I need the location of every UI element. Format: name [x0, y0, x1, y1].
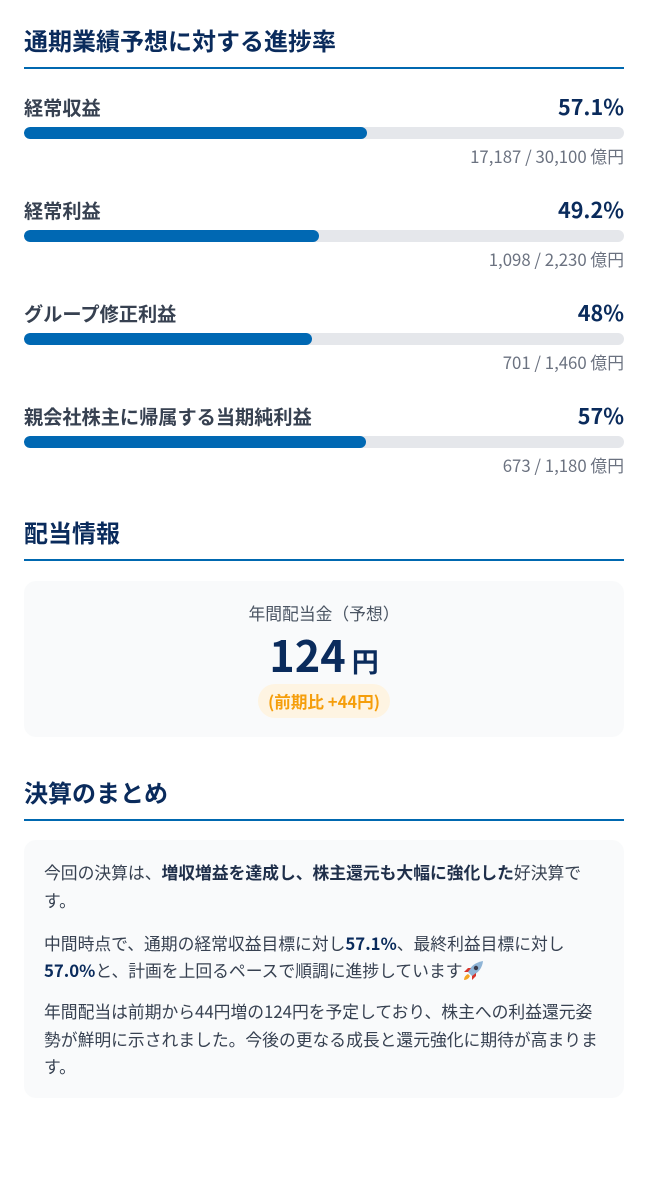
summary paragraph 2: 中間時点で、通期の経常収益目標に対し57.1%、最終利益目標に対し — [44, 931, 565, 955]
summary paragraph 2 — [44, 931, 565, 982]
heading: dividend — [24, 515, 624, 561]
heading: summary — [24, 775, 624, 821]
heading: summary: 決算のまとめ — [24, 774, 168, 809]
summary paragraph 3 — [44, 999, 598, 1078]
summary paragraph 1 — [44, 860, 581, 912]
icon: rocket — [464, 961, 483, 980]
dividend label: 年間配当金（予想） — [248, 601, 400, 625]
progress item: グループ修正利益 — [24, 297, 624, 374]
progress item: 親会社株主に帰属する当期純利益: 673 / 1,180 億円 — [503, 453, 624, 477]
heading: dividend: 配当情報 — [24, 514, 120, 549]
progress item: グループ修正利益: 48% — [578, 297, 624, 328]
summary paragraph 3: 年間配当は前期から44円増の124円を予定しており、株主への利益還元姿 — [44, 999, 592, 1023]
progress item: 経常収益: 17,187 / 30,100 億円 — [470, 144, 624, 168]
badge: year-on-year change: (前期比 +44円) — [268, 689, 380, 713]
summary paragraph 3: す。 — [44, 1054, 76, 1078]
dividend value: 124円 — [269, 623, 379, 685]
heading: progress: 通期業績予想に対する進捗率 — [24, 22, 336, 57]
progress item: グループ修正利益: グループ修正利益 — [24, 299, 176, 327]
progress item: 経常利益: 1,098 / 2,230 億円 — [489, 247, 624, 271]
summary paragraph 2: 57.0%と、計画を上回るペースで順調に進捗しています — [44, 958, 463, 982]
progress item: 経常利益: 49.2% — [558, 194, 624, 225]
progress item: 親会社株主に帰属する当期純利益: 親会社株主に帰属する当期純利益 — [24, 402, 312, 430]
summary paragraph 1: す。 — [44, 888, 76, 912]
heading: progress — [24, 22, 624, 69]
badge: year-on-year change — [258, 684, 390, 718]
panel: summary — [24, 840, 624, 1098]
progress item: 親会社株主に帰属する当期純利益: 57% — [578, 400, 624, 431]
progress item: 経常収益 — [24, 91, 624, 168]
progress item: 経常収益: 57.1% — [558, 91, 624, 122]
summary paragraph 1: 今回の決算は、増収増益を達成し、株主還元も大幅に強化した好決算で — [44, 860, 581, 884]
panel: dividend — [24, 581, 624, 737]
progress item: 経常収益: 経常収益 — [24, 93, 101, 121]
progress item: 経常利益 — [24, 194, 624, 271]
summary paragraph 3: 勢が鮮明に示されました。今後の更なる成長と還元強化に期待が高まりま — [44, 1027, 598, 1051]
progress item: グループ修正利益: 701 / 1,460 億円 — [503, 350, 624, 374]
progress item: 親会社株主に帰属する当期純利益 — [24, 400, 624, 477]
progress item: 経常利益: 経常利益 — [24, 196, 101, 224]
